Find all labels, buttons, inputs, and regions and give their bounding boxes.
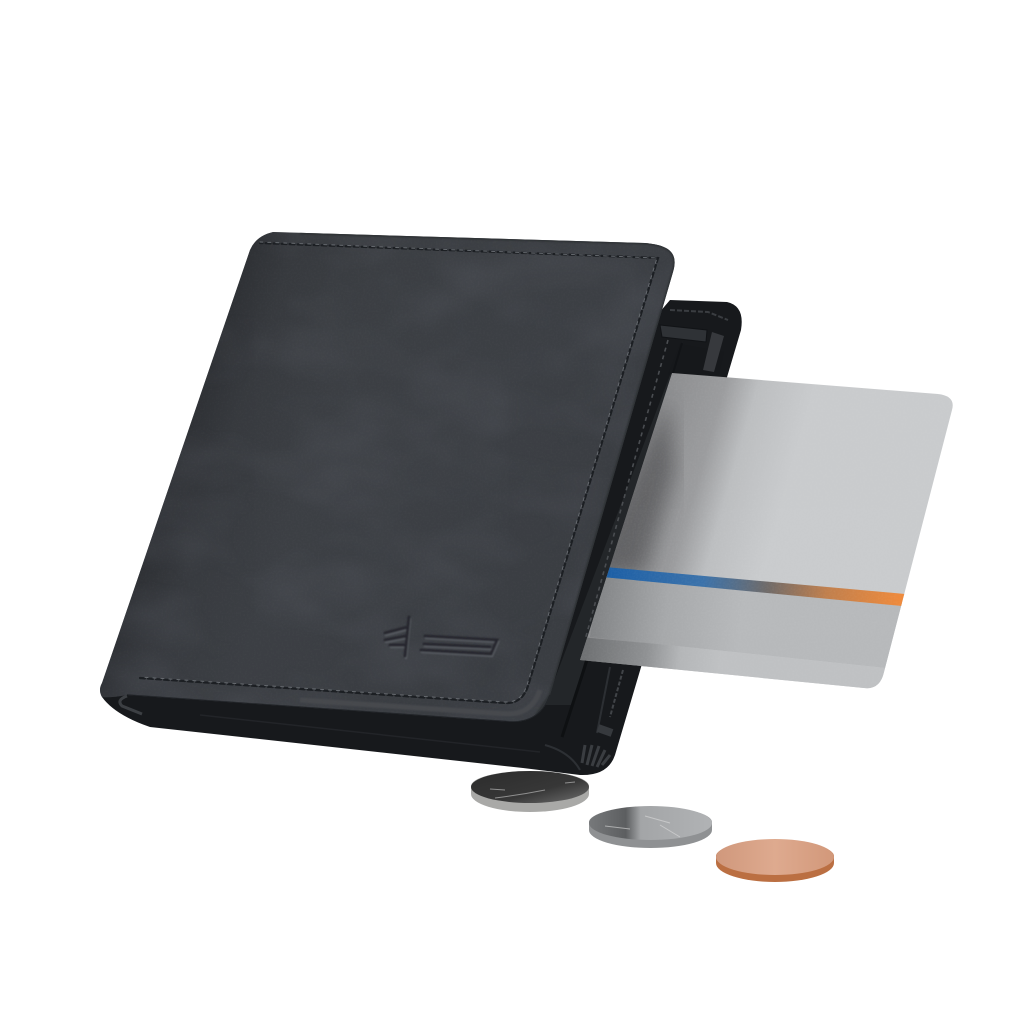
cover rim xyxy=(300,233,675,716)
card lower strip xyxy=(580,638,885,688)
credit card xyxy=(580,373,953,688)
wallet back panel xyxy=(102,300,742,775)
embossed logo xyxy=(385,617,498,658)
coin: nickel xyxy=(589,806,712,848)
wallet top details xyxy=(585,310,728,650)
wallet front cover xyxy=(95,225,685,725)
card shadow from wallet xyxy=(610,406,684,572)
dark slot above card xyxy=(668,344,724,378)
wallet lower right details xyxy=(200,660,623,770)
card colour stripe xyxy=(602,567,905,606)
cover stitching xyxy=(140,242,658,703)
bottom left lip xyxy=(120,696,142,714)
inner gusset strip beside cover xyxy=(545,338,684,705)
illustration: wallet with card and coins xyxy=(100,232,953,882)
coin: penny xyxy=(716,839,834,882)
coin: quarter xyxy=(471,771,589,812)
card lower band xyxy=(590,575,915,669)
